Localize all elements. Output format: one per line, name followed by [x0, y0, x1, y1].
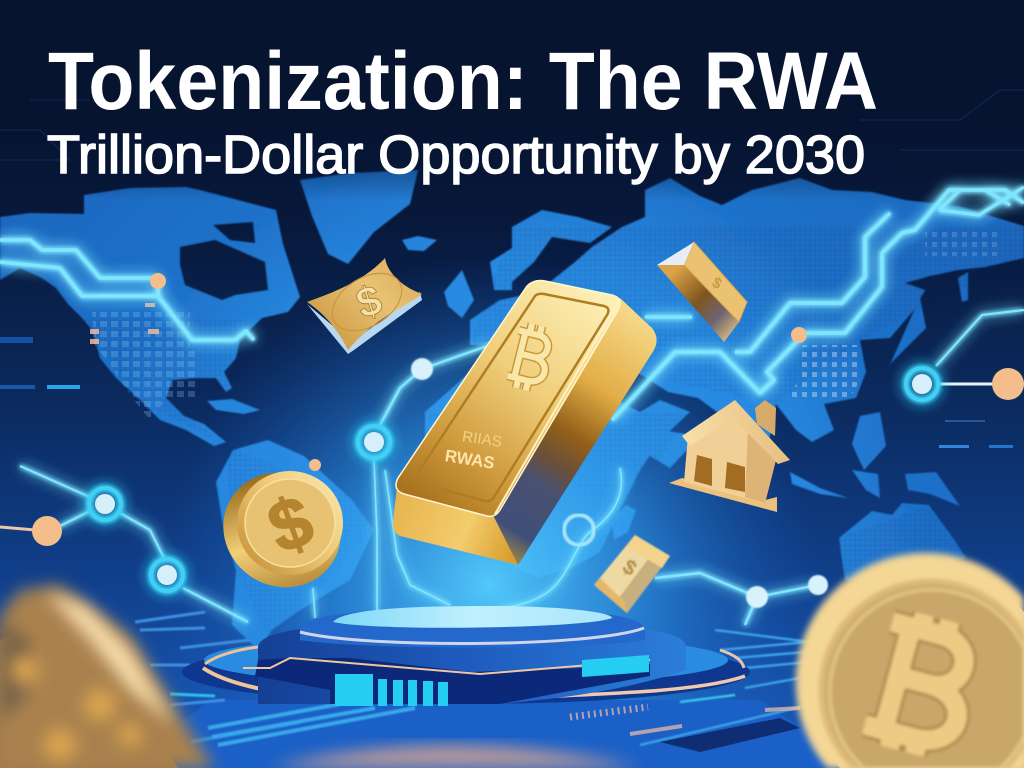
icon: small gold bar bottom — [594, 535, 670, 613]
subtitle: Trillion-Dollar Opportunity by 2030 — [47, 125, 865, 185]
HUD dashes left and right — [0, 337, 1013, 448]
middle tier — [300, 608, 645, 648]
floor base — [120, 700, 860, 768]
house roof — [682, 400, 790, 464]
route: asia main — [612, 190, 1024, 420]
icon: gold house — [669, 400, 790, 512]
outer ring — [182, 634, 750, 704]
bar top face — [396, 281, 620, 516]
route: north america lower — [0, 262, 254, 340]
cyan bars — [335, 655, 649, 706]
peach tick marks — [570, 707, 800, 734]
dark panel right — [660, 718, 800, 752]
route: north america upper — [0, 240, 158, 278]
cube symbol glow — [11, 656, 142, 761]
house walls — [684, 408, 778, 503]
ring node centers — [95, 374, 932, 585]
title: Tokenization: The RWA — [48, 36, 878, 127]
route: pacific — [936, 310, 1024, 366]
front panel — [255, 658, 650, 704]
bar inner bevel — [416, 294, 608, 501]
ring nodes — [89, 368, 938, 591]
route: south america down — [313, 460, 450, 618]
cube underlay — [0, 625, 178, 768]
blurred foreground gold cube — [0, 585, 215, 768]
glowing network lines — [0, 187, 1024, 625]
route: asia upper — [735, 213, 890, 352]
holographic platform — [182, 606, 750, 706]
peach trim — [243, 658, 650, 674]
small bar highlight — [657, 242, 694, 265]
map: continents — [0, 170, 1024, 650]
cube body — [0, 585, 215, 768]
side dashes left — [135, 612, 250, 705]
cube highlight — [45, 592, 175, 725]
route: bottom right — [655, 573, 818, 625]
route: pacific south left — [20, 466, 248, 622]
cube dark left — [0, 620, 30, 720]
peach nodes — [32, 273, 1024, 546]
light nodes — [411, 358, 828, 608]
icon: small gold bar bottom: $ — [618, 555, 641, 581]
icon: bitcoin mark on coin — [861, 607, 981, 763]
top dark fade behind the title — [0, 0, 1024, 200]
small bar dark side — [657, 265, 739, 342]
coin rim — [796, 553, 1024, 768]
peach connector lines — [0, 384, 1000, 531]
icon: bitcoin mark on bar — [505, 321, 555, 394]
side dashes right — [640, 630, 830, 745]
icon: gold banknote: $ — [350, 276, 387, 327]
route: far east — [939, 187, 1024, 215]
dots: north america — [92, 312, 195, 420]
dots: asia — [785, 345, 860, 398]
pale ring behind bar — [564, 515, 594, 545]
dashes: left — [0, 337, 80, 389]
coin underlay — [811, 569, 1024, 768]
world map — [0, 170, 1024, 650]
bar front face — [393, 487, 518, 565]
coin face — [818, 578, 1024, 768]
blurred foreground bitcoin coin — [796, 553, 1024, 768]
house chimney — [755, 400, 776, 436]
icon: gold coin with dollar sign: $ — [258, 480, 323, 569]
network nodes — [32, 273, 1024, 608]
route: africa loop — [500, 468, 621, 608]
top plate — [333, 606, 612, 628]
route: atlantic — [380, 345, 490, 425]
house base — [669, 478, 777, 512]
bar edge highlight — [495, 300, 619, 514]
dashes: right — [939, 420, 1013, 448]
house doors — [694, 455, 745, 492]
icon: small gold bar top right: $ — [709, 274, 725, 293]
map: grid texture — [83, 226, 1024, 640]
label: RIIAS: RIIAS — [461, 428, 503, 451]
base tier — [258, 622, 686, 704]
icon: gold banknote — [307, 258, 422, 354]
label: RWAS: RWAS — [444, 446, 496, 473]
connector: right — [940, 382, 1000, 386]
faint circuit lines in header — [0, 90, 1024, 160]
small bar gold face — [684, 242, 747, 322]
icon: small gold bar top right — [657, 242, 747, 342]
bar right face — [493, 298, 657, 565]
coin inner ring — [830, 590, 1024, 768]
icon: gold coin with dollar sign — [201, 450, 363, 610]
main gold bar — [393, 281, 657, 565]
route: europe — [645, 315, 692, 319]
middle tier rim — [300, 628, 644, 644]
route: node link — [58, 510, 92, 527]
dots: siberia — [925, 228, 1000, 256]
floor stripes left — [190, 704, 415, 745]
floor reflection bloom — [270, 745, 640, 768]
floor with circuit stripes — [120, 612, 860, 768]
map data dots — [90, 228, 1000, 420]
central platform light bloom — [160, 255, 820, 768]
highlights on north america — [90, 303, 159, 344]
connector: left — [0, 527, 47, 531]
